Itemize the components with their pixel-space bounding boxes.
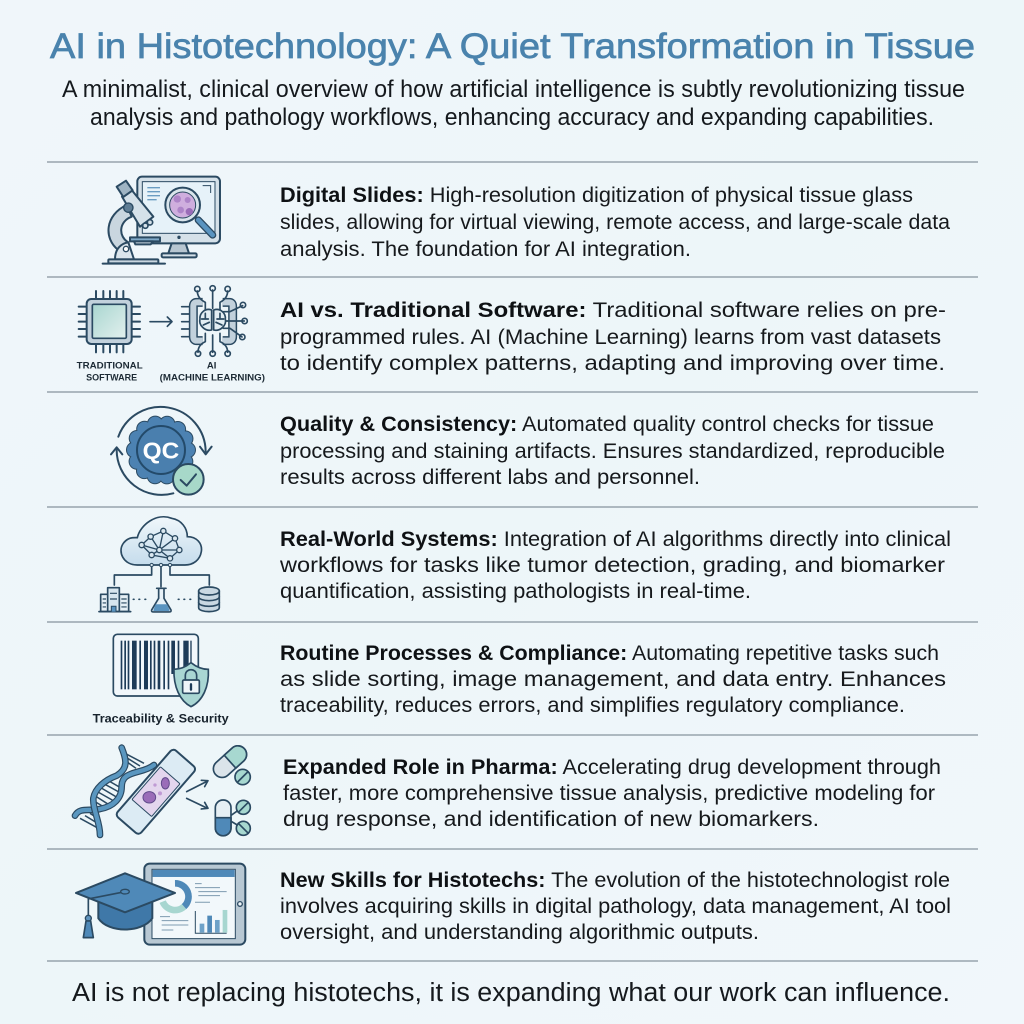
text: new skills for histotechs: New Skills for Histotechs: The evolution of the histotechnologist role [280, 868, 950, 892]
text: quality and consistency [280, 412, 945, 489]
traditional chip [79, 291, 140, 352]
text: new skills for histotechs: involves acquiring skills in digital pathology, data management, AI tool [280, 894, 951, 918]
subtitle: analysis and pathology workflows, enhancing accuracy and expanding capabilities. [90, 104, 934, 131]
text: new skills for histotechs [280, 868, 951, 944]
icon: microscope and monitor [103, 177, 220, 264]
icon: QC gear badge [111, 407, 212, 495]
text: real-world systems [279, 527, 951, 603]
text: routine processes and compliance [280, 641, 946, 717]
icon: barcode with security shield [93, 634, 229, 726]
text: new skills for histotechs: oversight, and understanding algorithmic outputs. [280, 920, 759, 944]
text: digital slides: analysis. The foundation for AI integration. [280, 237, 691, 261]
text: AI vs traditional software [280, 298, 946, 375]
icon: traditional software versus AI [77, 286, 265, 383]
text: expanded role in pharma: Expanded Role in Pharma: Accelerating drug development through [283, 755, 941, 779]
text: real-world systems: workflows for tasks like tumor detection, grading, and biomarker [279, 553, 945, 577]
icon: cloud network and systems [99, 517, 219, 612]
text: digital slides: Digital Slides: High-resolution digitization of physical tissue glass [280, 183, 913, 207]
icon captions: (MACHINE LEARNING) [160, 372, 265, 383]
text: routine processes and compliance: traceability, reduces errors, and simplifies regulatory compliance. [280, 693, 905, 717]
text: routine processes and compliance: as slide sorting, image management, and data entry. Enhances [280, 667, 946, 691]
database [199, 587, 219, 612]
text: AI vs traditional software: programmed rules. AI (Machine Learning) learns from vast datasets [280, 325, 941, 349]
icon captions: AI [207, 360, 216, 371]
text: quality and consistency: Quality & Consistency: Automated quality control checks for tissue [280, 412, 934, 436]
closing statement: AI is not replacing histotechs, it is expanding what our work can influence. [72, 979, 950, 1007]
subtitle: A minimalist, clinical overview of how artificial intelligence is subtly revolutionizing tissue [62, 76, 965, 103]
caption: Traceability & Security [93, 712, 229, 726]
icon captions: SOFTWARE [86, 372, 137, 383]
icon: QC gear badge: QC [143, 437, 179, 463]
icon captions [77, 360, 265, 383]
arrow [150, 317, 172, 326]
subtitle [62, 76, 965, 131]
text: AI vs traditional software: to identify complex patterns, adapting and improving over time. [280, 351, 945, 375]
text: expanded role in pharma: faster, more comprehensive tissue analysis, predictive modeling for [283, 781, 935, 805]
title: AI in Histotechnology: A Quiet Transformation in Tissue [50, 27, 975, 66]
text: quality and consistency: results across different labs and personnel. [280, 465, 700, 489]
text: quality and consistency: processing and staining artifacts. Ensures standardized, reproducible [280, 439, 945, 463]
text: real-world systems: quantification, assisting pathologists in real-time. [280, 579, 751, 603]
flask [152, 588, 171, 612]
icon captions: TRADITIONAL [77, 360, 143, 371]
icon: graduation cap and tablet [76, 864, 245, 945]
text: routine processes and compliance: Routine Processes & Compliance: Automating repetitive tasks such [280, 641, 939, 665]
text: expanded role in pharma: drug response, and identification of new biomarkers. [283, 807, 819, 831]
AI chip with brain [182, 286, 247, 356]
icon: DNA, slide and pills [75, 742, 250, 836]
hospital [99, 588, 131, 612]
text: expanded role in pharma [283, 755, 941, 831]
text: digital slides [280, 183, 950, 261]
text: real-world systems: Real-World Systems: Integration of AI algorithms directly into clinical [280, 527, 951, 551]
text: AI vs traditional software: AI vs. Traditional Software: Traditional software relies on pre- [280, 298, 946, 322]
text: digital slides: slides, allowing for virtual viewing, remote access, and large-scale data [280, 210, 950, 234]
